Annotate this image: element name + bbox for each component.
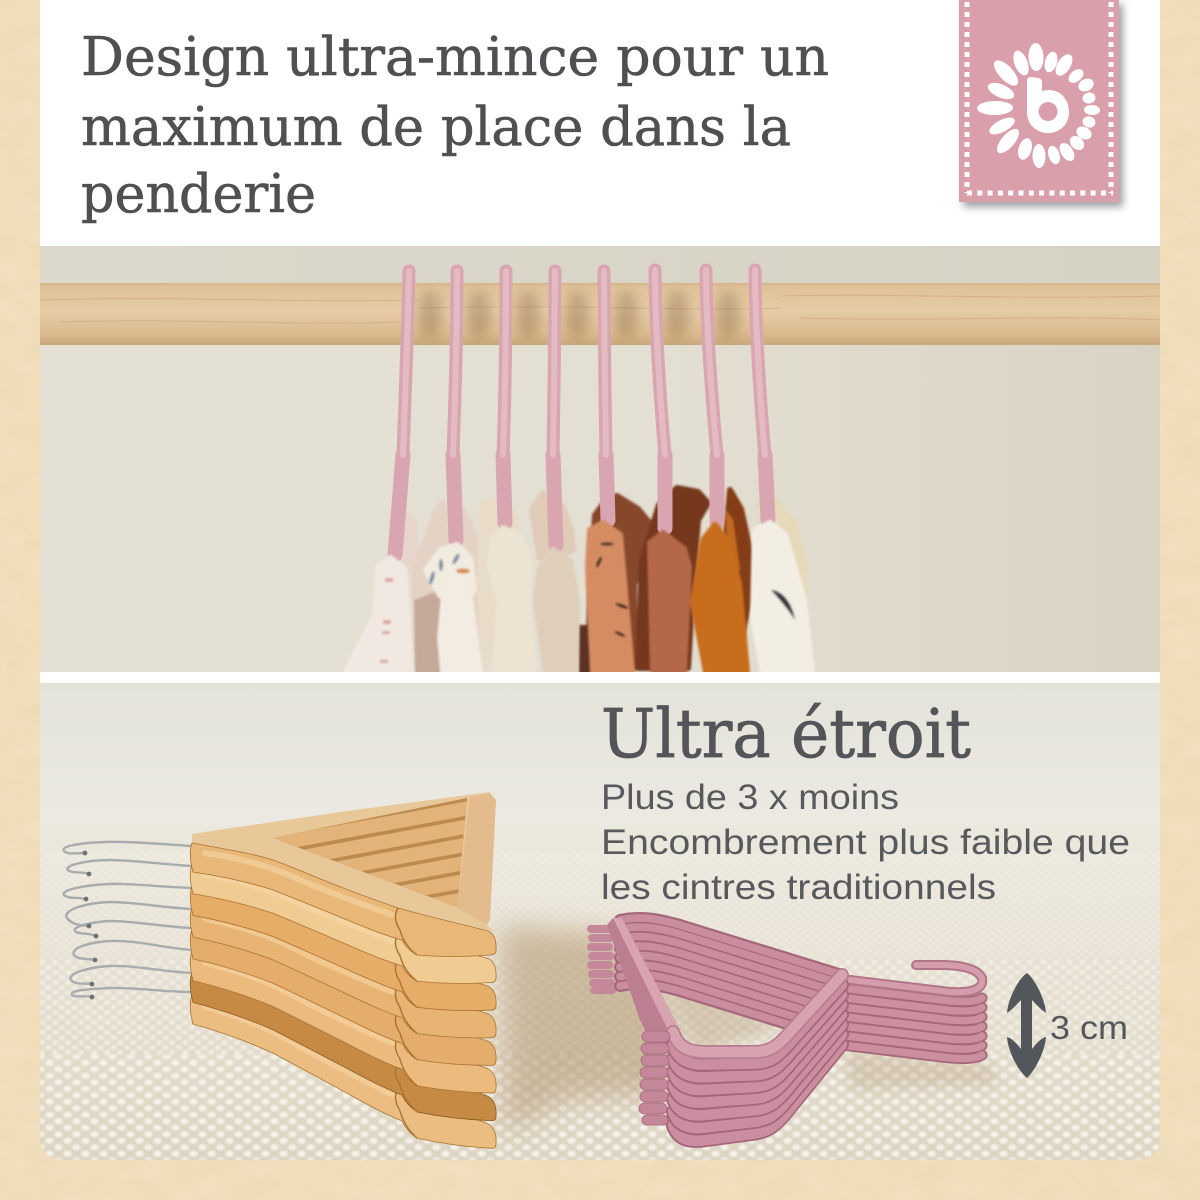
stack of pink hangers [587, 918, 982, 1144]
eight pink hangers [395, 270, 768, 555]
clothes back layer [401, 488, 805, 675]
panel: photo comparing wood and pink hangers [40, 683, 1160, 1160]
text block: description: Encombrement plus faible que [601, 823, 1130, 862]
wooden rail [40, 283, 1160, 345]
garment prints [380, 578, 393, 663]
title: maximum de place dans la [81, 97, 791, 158]
stack of wooden hangers [190, 792, 496, 1151]
white divider band [40, 672, 1160, 683]
panel: photo of hangers on wooden rail [40, 246, 1160, 675]
text block: description: les cintres traditionnels [601, 868, 996, 907]
label: 3 cm: 3 cm [1050, 1009, 1128, 1046]
heading: Ultra étroit: Ultra étroit [601, 695, 971, 773]
brand label tag [959, 0, 1123, 207]
title: Design ultra-mince pour un [81, 27, 829, 88]
clothes front layer [346, 523, 812, 672]
text block: description [601, 778, 1130, 907]
metal hooks of wooden hangers [63, 842, 192, 999]
white header panel [40, 0, 1160, 246]
icon: flower logo [977, 43, 1100, 168]
text block: description: Plus de 3 x moins [601, 778, 899, 817]
woven rug [40, 825, 1160, 1160]
title: penderie [81, 164, 316, 225]
title [81, 27, 829, 225]
arrow: 3 cm height [1007, 973, 1046, 1078]
